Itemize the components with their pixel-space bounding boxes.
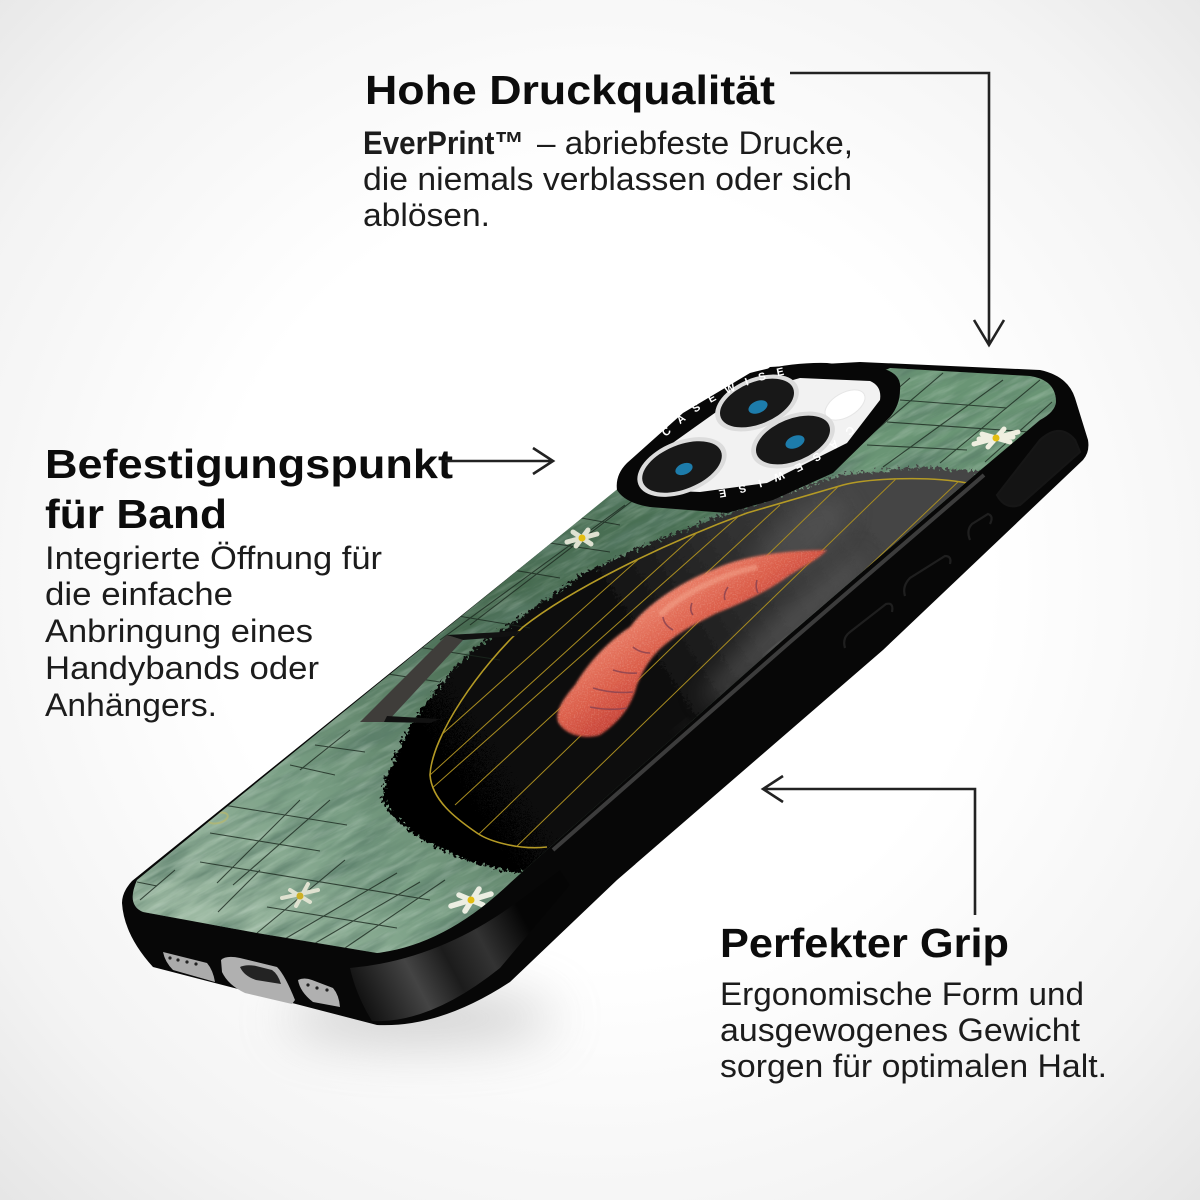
callout: Perfekter Grip [720,920,1107,1084]
lens three [629,425,735,509]
lens one [707,363,807,443]
body text: – abriebfeste Drucke, [537,125,853,161]
light texture [133,368,1054,953]
brand text bottom: CASEWISE [718,427,854,498]
body text [720,976,1107,1084]
green texture [133,368,1056,952]
gold outline [430,479,967,848]
body text: Handybands oder [45,650,319,686]
arrow: to camera [445,448,553,474]
body text: Anbringung eines [45,613,313,649]
faded daisy [208,812,229,824]
mist [766,610,817,654]
arrow: to phone side [763,776,975,915]
daisy middle left [567,530,597,546]
brand text top: CASEWISE [662,367,784,436]
body text: ausgewogenes Gewicht [720,1012,1080,1048]
callout: Befestigungspunkt für Band [45,441,453,723]
heading: Perfekter Grip [720,920,1009,966]
bottom ports [163,952,340,1007]
gold stripes [430,475,1000,848]
body text: ablösen. [363,197,490,233]
callout: Hohe Druckqualität [363,67,853,233]
heading [45,441,453,537]
case body [122,362,1088,1025]
black blob [383,467,985,873]
printed back face [132,368,1056,953]
sausage grain [558,550,827,737]
body text: Integrierte Öffnung für [45,540,382,576]
daisy bottom center [282,884,318,906]
body text [363,125,853,233]
heading: Hohe Druckqualität [365,67,775,113]
tether slot [360,631,520,723]
body text: sorgen für optimalen Halt. [720,1048,1107,1084]
arrow: to top of phone [790,73,1004,345]
left speaker [163,952,215,982]
body text: die niemals verblassen oder sich [363,161,852,197]
heading: für Band [45,491,227,537]
body text: die einfache [45,576,233,612]
flash [820,384,870,426]
phone shadow [285,994,555,1042]
body text [45,540,382,723]
corner bumper highlight [350,475,984,1021]
sausage [555,548,828,739]
body text: Ergonomische Form und [720,976,1084,1012]
bump ring [617,363,900,513]
usb port [221,957,295,1004]
daisies [207,429,1018,911]
lens two [743,400,843,480]
heading: Befestigungspunkt [45,441,453,487]
body text: EverPrint™ [363,125,524,161]
grid lines [137,373,1052,950]
daisy top right [974,429,1018,447]
right speaker [298,978,340,1007]
daisy bottom right [451,889,491,911]
camera bump [616,362,900,513]
phone in case [122,362,1088,1026]
green background [132,368,1056,953]
body text: Anhängers. [45,687,217,723]
glass [640,378,880,492]
side buttons [844,431,1080,648]
